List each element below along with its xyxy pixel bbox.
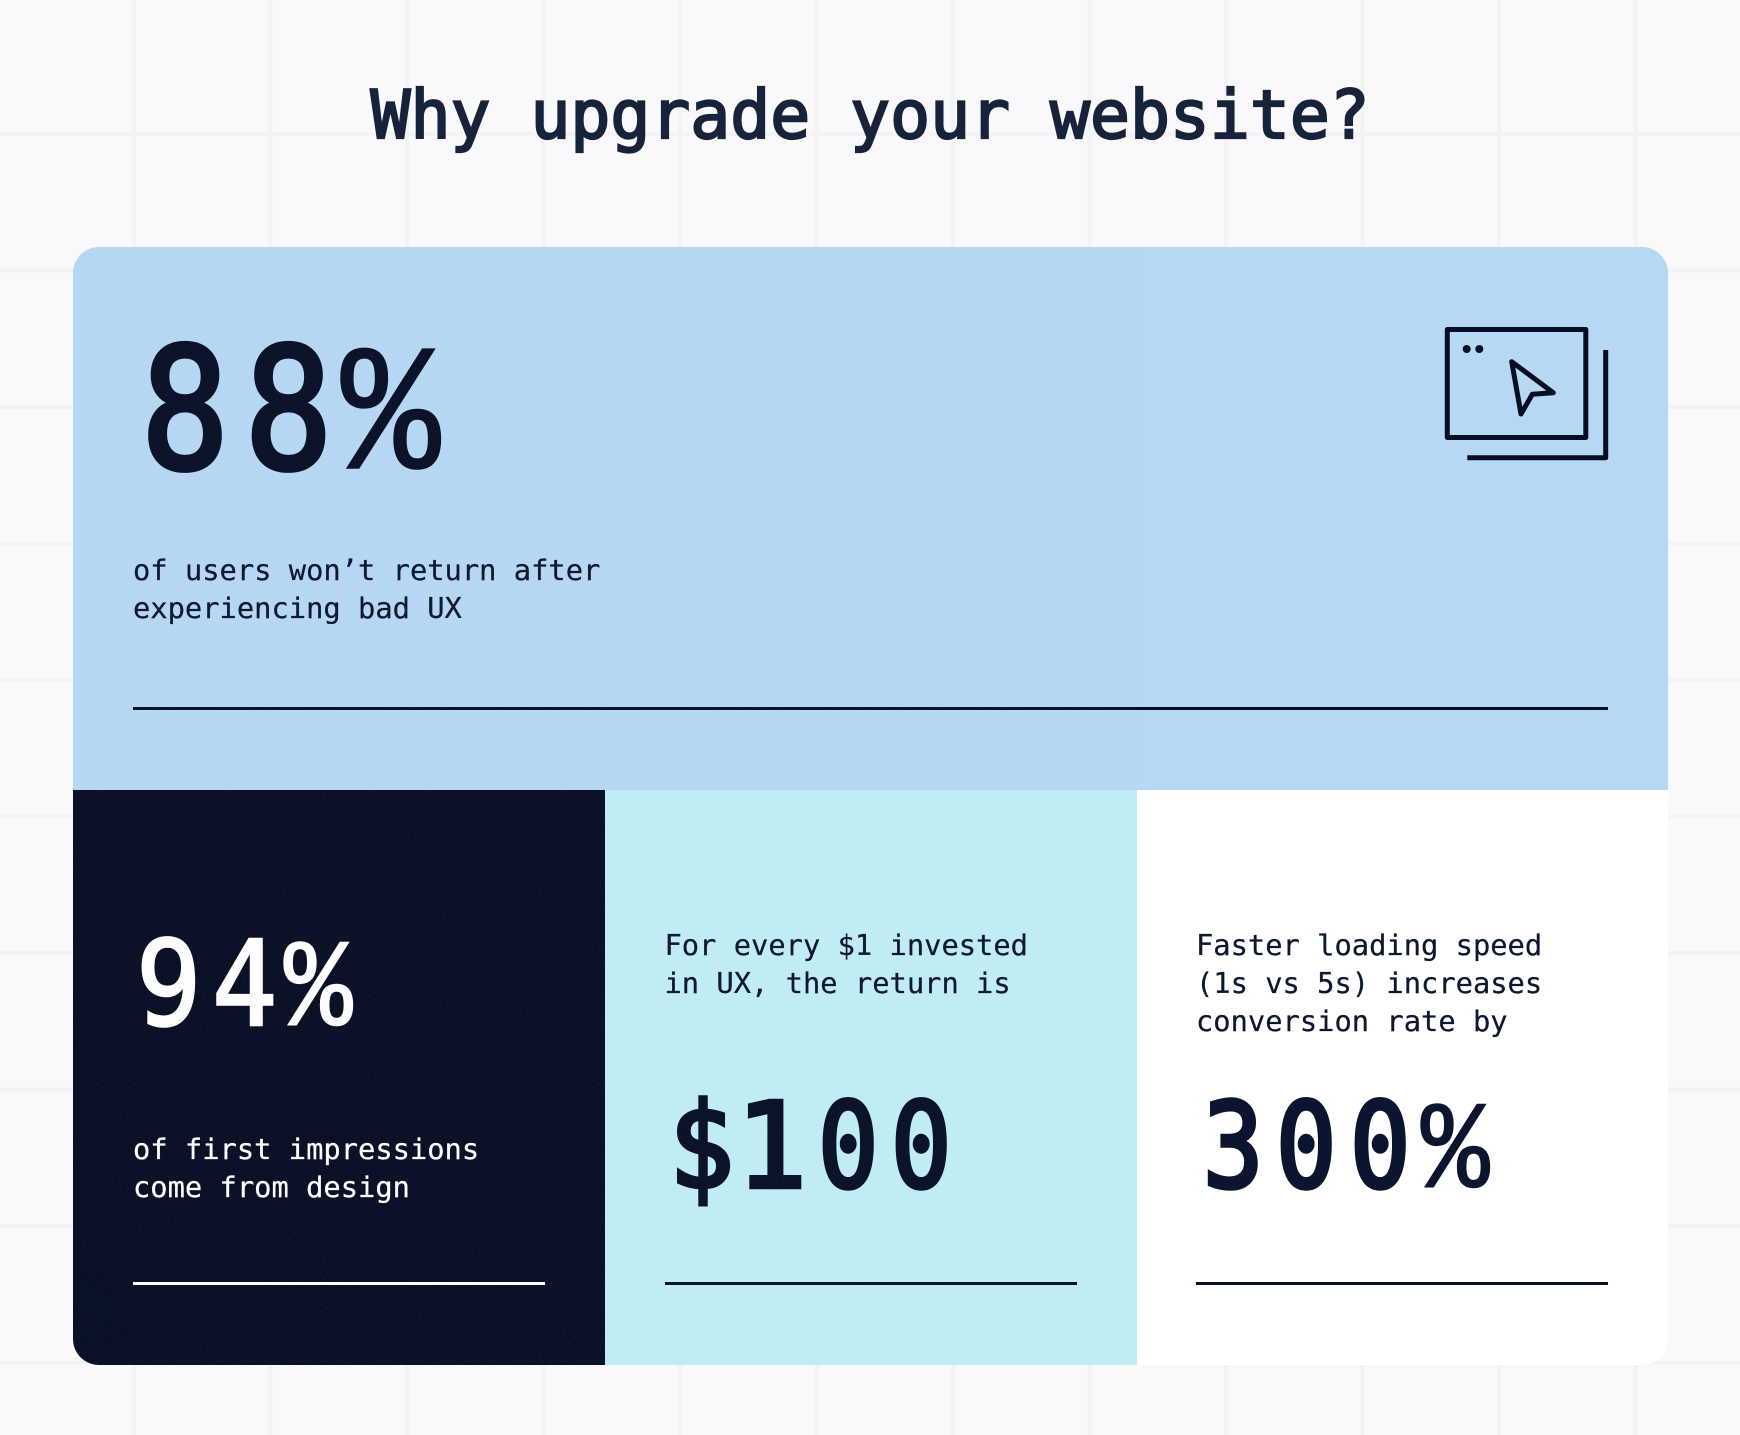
- panel: stats card: [73, 247, 1668, 1365]
- stat value: $100: [669, 1077, 951, 1215]
- stat value: 300%: %: [1421, 1084, 1490, 1224]
- stat value: 88%: 8: [141, 313, 229, 509]
- stat value: 88%: 8: [244, 313, 332, 509]
- icon: browser windows with cursor: [1447, 330, 1606, 458]
- stat value: $100: 0: [818, 1077, 878, 1215]
- text: first impressions description: come from design: [133, 1170, 410, 1204]
- stat value: $100: $: [669, 1078, 734, 1215]
- stat value: $100: 0: [891, 1077, 951, 1215]
- text: UX return description: in UX, the return is: [664, 966, 1011, 1000]
- text: bad UX description: experiencing bad UX: [133, 591, 463, 625]
- divider line: [133, 1282, 545, 1285]
- stat value: 300%: 0: [1276, 1077, 1336, 1215]
- text: loading speed description: (1s vs 5s) increases: [1196, 966, 1542, 1000]
- title: Why upgrade your website?: [370, 76, 1370, 154]
- panel: 300% stat: [1137, 790, 1668, 1365]
- stat value: 88%: [141, 313, 441, 522]
- text: UX return description: For every $1 invested: [664, 928, 1028, 962]
- stat value: 300%: [1203, 1077, 1490, 1224]
- stat value: 94%: 9: [136, 916, 201, 1053]
- stat value: 300%: 0: [1350, 1077, 1410, 1215]
- divider line: [665, 1282, 1077, 1285]
- text: first impressions description: of first impressions: [133, 1132, 479, 1166]
- stat value: 94%: %: [284, 922, 353, 1062]
- divider line: [1196, 1282, 1608, 1285]
- text: bad UX description: of users won’t return after: [133, 553, 600, 587]
- text: loading speed description: conversion rate by: [1196, 1004, 1508, 1038]
- panel: 88% stat: [73, 247, 1668, 790]
- stat value: 88%: %: [341, 318, 441, 522]
- panel: $100 stat: [605, 790, 1137, 1365]
- stat value: 94%: [136, 916, 353, 1062]
- divider line: [133, 707, 1608, 710]
- panel: 94% stat: [73, 790, 605, 1365]
- stat value: 94%: 4: [212, 916, 277, 1053]
- stat value: $100: 1: [736, 1077, 807, 1215]
- text: loading speed description: Faster loading speed: [1196, 928, 1542, 962]
- stat value: 300%: 3: [1203, 1077, 1263, 1215]
